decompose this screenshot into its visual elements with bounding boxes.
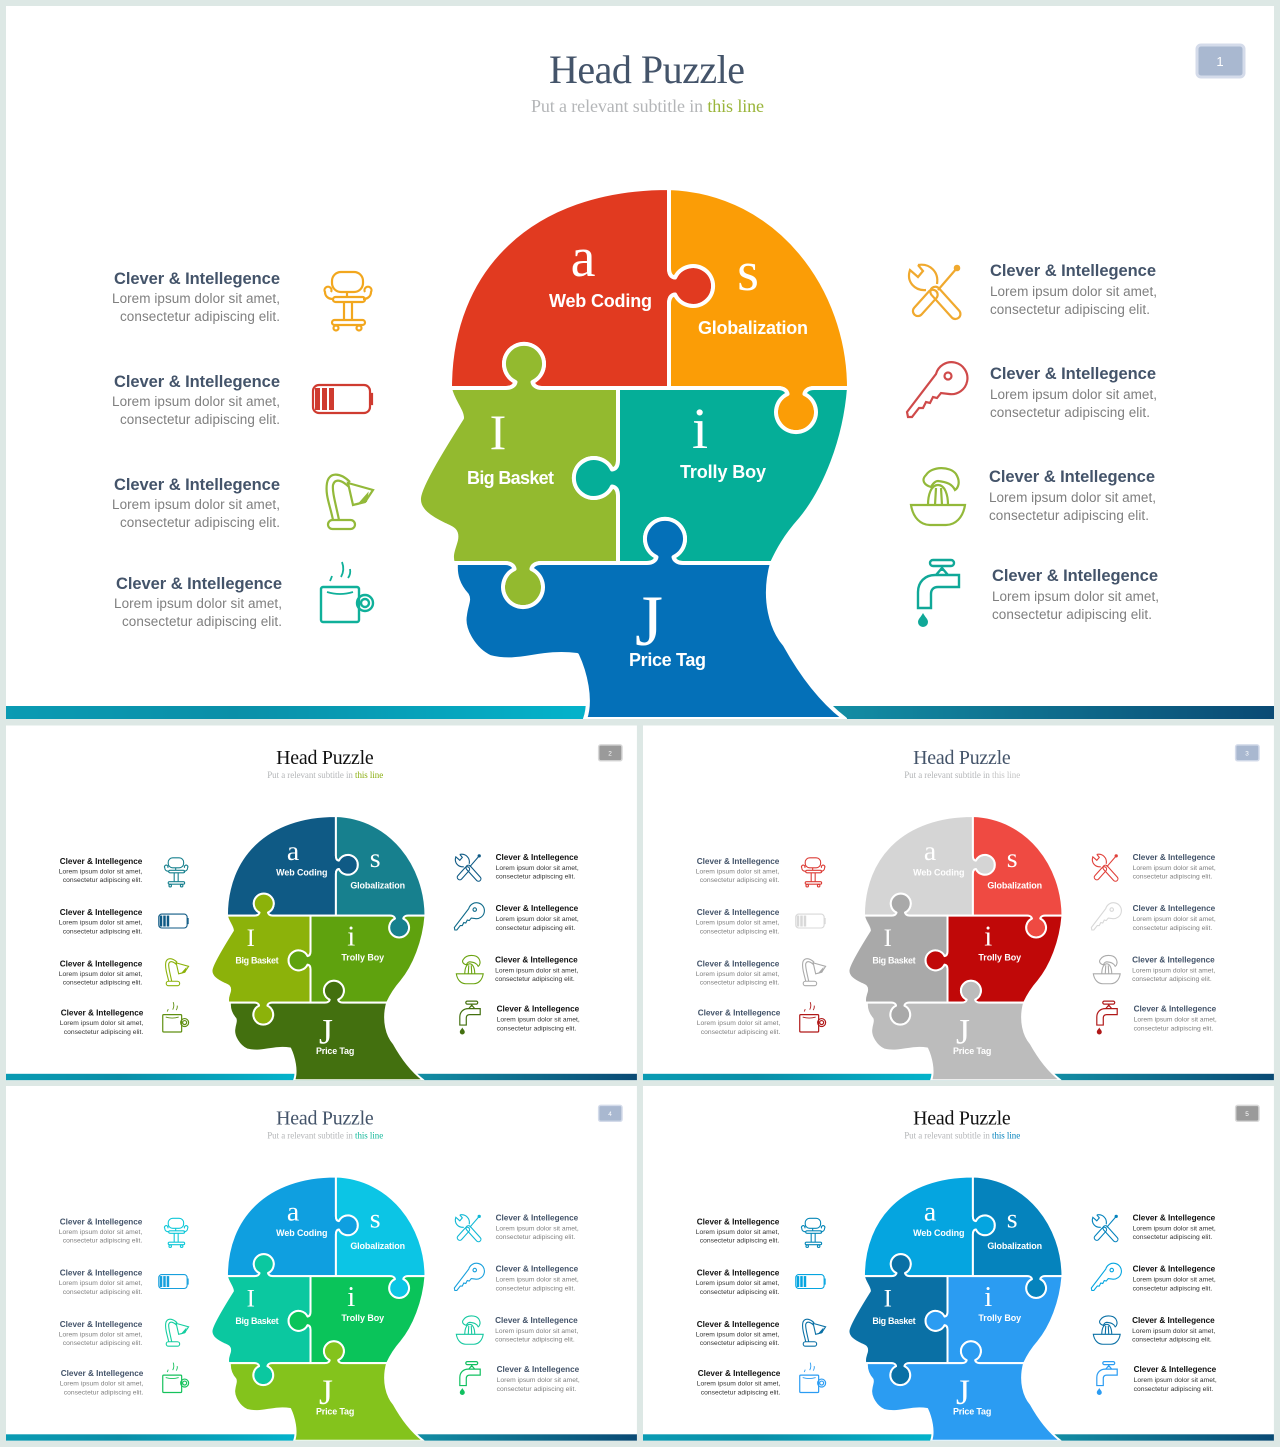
callout: faucet: Clever & Intellegence [992,567,1158,585]
callout: lamp [59,1319,189,1347]
callout: faucet [1097,1001,1217,1034]
callout: faucet: Clever & Intellegence [1134,1365,1217,1374]
callout: key: consectetur adipiscing elit. [990,405,1150,420]
callout: battery: consectetur adipiscing elit. [120,412,280,427]
callout: lamp: Lorem ipsum dolor sit amet, [696,971,779,978]
subtitle: Put a relevant subtitle in this line [267,770,383,780]
subtitle: Put a relevant subtitle in this line [904,770,1020,780]
callout: chair: consectetur adipiscing elit. [120,309,280,324]
puzzle head: s [370,1203,381,1234]
callout: lamp: consectetur adipiscing elit. [700,980,779,987]
callout: battery: Lorem ipsum dolor sit amet, [112,394,280,409]
callout: cup: Lorem ipsum dolor sit amet, [60,1381,143,1388]
callout: key: Clever & Intellegence [496,904,579,913]
callout: faucet [460,1362,580,1395]
puzzle head: a [287,836,299,867]
puzzle head: Globalization [987,1241,1042,1251]
callout: lamp: consectetur adipiscing elit. [63,1340,142,1347]
callout: chair: Clever & Intellegence [697,1217,780,1226]
callout: key [1091,1263,1216,1292]
callout: faucet [460,1001,580,1034]
puzzle head: Price Tag [316,1046,354,1056]
callout: tools: Clever & Intellegence [496,1213,579,1222]
callout: battery: consectetur adipiscing elit. [700,928,779,935]
callout: chair: Lorem ipsum dolor sit amet, [696,868,779,875]
puzzle head: Big Basket [235,955,279,965]
callout: faucet: consectetur adipiscing elit. [1134,1026,1213,1033]
puzzle head: I [247,1285,255,1312]
callout: juicer: Clever & Intellegence [989,468,1155,486]
puzzle head: Web Coding [913,867,964,877]
puzzle head: Trolly Boy [978,1313,1021,1323]
callout: tools [455,1213,579,1243]
puzzle head: Big Basket [872,1316,916,1326]
puzzle head: s [1007,1203,1018,1234]
puzzle head: J [635,581,663,661]
panel: main slide 1 [6,6,1274,719]
callout: cup [697,1002,826,1036]
puzzle head: i [347,920,355,952]
callout: juicer: consectetur adipiscing elit. [495,976,575,983]
panel: slide 5 blue [643,1086,1274,1441]
callout: faucet: Lorem ipsum dolor sit amet, [497,1377,580,1384]
callout: cup: Clever & Intellegence [61,1369,144,1378]
callout: chair: Lorem ipsum dolor sit amet, [59,1229,142,1236]
callout: tools: consectetur adipiscing elit. [990,302,1150,317]
puzzle head: Web Coding [276,1228,327,1238]
title: Head Puzzle [276,1107,374,1129]
callout: battery [59,908,188,935]
callout: faucet: consectetur adipiscing elit. [1134,1386,1213,1393]
callout: lamp: Clever & Intellegence [60,959,143,968]
puzzle head: J [319,1372,333,1412]
callout: juicer: consectetur adipiscing elit. [1132,1337,1212,1344]
page badge [599,1105,622,1121]
callout: cup: Clever & Intellegence [698,1009,781,1018]
callout: cup: Lorem ipsum dolor sit amet, [60,1020,143,1027]
callout: juicer: Lorem ipsum dolor sit amet, [989,490,1156,505]
callout: cup: Clever & Intellegence [116,575,282,593]
callout: lamp: Lorem ipsum dolor sit amet, [112,497,280,512]
puzzle head: Web Coding [913,1228,964,1238]
title: Head Puzzle [913,747,1011,769]
callout: tools: consectetur adipiscing elit. [496,874,575,881]
puzzle head: s [1007,843,1018,874]
callout: chair [112,270,372,330]
subtitle: Put a relevant subtitle in this line [531,96,764,116]
callout: battery: consectetur adipiscing elit. [63,1289,142,1296]
callout: lamp [696,1319,826,1347]
puzzle head: Trolly Boy [341,1313,384,1323]
callout: lamp: Clever & Intellegence [114,476,280,494]
page badge [1236,1105,1259,1121]
puzzle head: Web Coding [276,867,327,877]
callout: tools: Lorem ipsum dolor sit amet, [496,865,579,872]
callout: lamp [112,475,373,530]
callout: lamp: Clever & Intellegence [60,1320,143,1329]
callout: juicer: Lorem ipsum dolor sit amet, [1132,967,1215,974]
callout: lamp: Clever & Intellegence [697,1320,780,1329]
callout: juicer: Clever & Intellegence [495,955,578,964]
callout: lamp: consectetur adipiscing elit. [63,980,142,987]
panel: slide 4 aqua and green [6,1086,637,1441]
callout: chair [696,1217,825,1247]
callout: battery: Lorem ipsum dolor sit amet, [59,1280,142,1287]
callout: juicer: consectetur adipiscing elit. [1132,976,1212,983]
callout: juicer [1093,955,1215,984]
callout: chair: Lorem ipsum dolor sit amet, [696,1229,779,1236]
callout: cup: consectetur adipiscing elit. [701,1389,780,1396]
callout: cup: Clever & Intellegence [698,1369,781,1378]
puzzle head: s [370,843,381,874]
callout: chair [59,857,188,887]
callout: chair: consectetur adipiscing elit. [63,877,142,884]
callout: battery [696,1269,825,1296]
callout: faucet: Lorem ipsum dolor sit amet, [497,1017,580,1024]
puzzle head: Price Tag [629,650,706,670]
callout: chair: consectetur adipiscing elit. [63,1238,142,1245]
puzzle head: Big Basket [872,955,916,965]
title: Head Puzzle [549,47,745,92]
puzzle head: I [247,925,255,952]
page badge: 3 [1245,750,1249,757]
page badge: 1 [1216,54,1224,69]
callout: tools: Lorem ipsum dolor sit amet, [496,1225,579,1232]
title: Head Puzzle [276,747,374,769]
callout: tools: Lorem ipsum dolor sit amet, [1133,1225,1216,1232]
callout: key [454,1263,579,1292]
callout: battery: Clever & Intellegence [697,1269,780,1278]
callout: key: Clever & Intellegence [990,365,1156,383]
callout: cup: Lorem ipsum dolor sit amet, [114,596,282,611]
callout: juicer: Lorem ipsum dolor sit amet, [495,1328,578,1335]
puzzle head: a [924,1196,936,1227]
callout: key: Lorem ipsum dolor sit amet, [1133,916,1216,923]
callout: tools: Clever & Intellegence [990,262,1156,280]
callout: lamp: Lorem ipsum dolor sit amet, [59,971,142,978]
callout: cup [114,562,373,629]
callout: battery: Clever & Intellegence [114,373,280,391]
callout: lamp [696,959,826,987]
callout: faucet: Clever & Intellegence [1134,1005,1217,1014]
callout: key: consectetur adipiscing elit. [1133,925,1212,932]
puzzle head: Globalization [350,1241,405,1251]
callout: cup: consectetur adipiscing elit. [122,614,282,629]
callout: cup: consectetur adipiscing elit. [64,1029,143,1036]
callout: tools [909,262,1157,321]
puzzle head [848,1177,1062,1441]
callout: cup: Lorem ipsum dolor sit amet, [697,1381,780,1388]
callout: chair: consectetur adipiscing elit. [700,877,779,884]
callout: lamp: consectetur adipiscing elit. [700,1340,779,1347]
callout: key: Lorem ipsum dolor sit amet, [1133,1277,1216,1284]
callout: lamp: consectetur adipiscing elit. [120,515,280,530]
callout: lamp: Lorem ipsum dolor sit amet, [696,1331,779,1338]
callout: juicer: Lorem ipsum dolor sit amet, [495,967,578,974]
callout: tools [1092,853,1216,882]
callout: tools [1092,1213,1216,1243]
callout: key: consectetur adipiscing elit. [496,925,575,932]
callout: cup: consectetur adipiscing elit. [64,1389,143,1396]
puzzle head: a [571,227,596,289]
callout: lamp: Lorem ipsum dolor sit amet, [59,1331,142,1338]
callout: key: Lorem ipsum dolor sit amet, [496,916,579,923]
callout: key: consectetur adipiscing elit. [1133,1285,1212,1292]
subtitle: Put a relevant subtitle in this line [267,1131,383,1141]
puzzle head: Globalization [698,318,808,338]
callout: juicer: Lorem ipsum dolor sit amet, [1132,1328,1215,1335]
callout: tools: Lorem ipsum dolor sit amet, [990,284,1157,299]
callout: chair: Lorem ipsum dolor sit amet, [112,291,280,306]
callout: battery [696,908,825,935]
callout: faucet: Lorem ipsum dolor sit amet, [1134,1377,1217,1384]
callout: cup [60,1002,189,1036]
puzzle head: i [984,1281,992,1313]
callout: tools: consectetur adipiscing elit. [1133,874,1212,881]
callout: key: Clever & Intellegence [1133,1265,1216,1274]
callout: tools [455,853,579,882]
callout: battery [112,373,372,427]
callout: faucet: consectetur adipiscing elit. [497,1026,576,1033]
callout: battery: consectetur adipiscing elit. [63,928,142,935]
callout: faucet: Lorem ipsum dolor sit amet, [992,589,1159,604]
callout: tools: Clever & Intellegence [1133,1213,1216,1222]
callout: cup: Lorem ipsum dolor sit amet, [697,1020,780,1027]
puzzle head: i [984,920,992,952]
puzzle head: Trolly Boy [341,952,384,962]
callout: tools: consectetur adipiscing elit. [1133,1234,1212,1241]
callout: lamp: Clever & Intellegence [697,959,780,968]
page badge [1236,745,1259,761]
puzzle head: Trolly Boy [978,952,1021,962]
callout: cup: consectetur adipiscing elit. [701,1029,780,1036]
callout: battery: Lorem ipsum dolor sit amet, [59,920,142,927]
callout: cup [697,1363,826,1396]
callout: key: Lorem ipsum dolor sit amet, [496,1277,579,1284]
callout: chair: consectetur adipiscing elit. [700,1238,779,1245]
puzzle head: J [956,1372,970,1412]
callout: faucet [918,560,1159,627]
puzzle head: s [737,241,759,303]
callout: lamp [59,959,189,987]
callout: key: consectetur adipiscing elit. [496,1285,575,1292]
callout: juicer [456,1316,578,1344]
callout: juicer [1093,1316,1215,1344]
callout: battery: Clever & Intellegence [60,908,143,917]
callout: chair: Clever & Intellegence [60,1217,143,1226]
callout: faucet [1097,1362,1217,1395]
page badge: 4 [608,1111,612,1118]
callout: battery: Clever & Intellegence [60,1269,143,1278]
callout: juicer [911,468,1156,525]
callout: juicer: Clever & Intellegence [1132,1316,1215,1325]
callout: key [1091,903,1216,932]
callout: chair [59,1217,188,1247]
callout: battery [59,1269,188,1296]
callout: faucet: Lorem ipsum dolor sit amet, [1134,1017,1217,1024]
callout: cup [60,1363,189,1396]
puzzle head: J [319,1011,333,1051]
puzzle head [211,1177,425,1441]
puzzle head: Web Coding [549,291,652,311]
puzzle head: Globalization [987,881,1042,891]
callout: faucet: Clever & Intellegence [497,1365,580,1374]
callout: juicer: consectetur adipiscing elit. [495,1337,575,1344]
puzzle head: Price Tag [953,1406,991,1416]
callout: tools: consectetur adipiscing elit. [496,1234,575,1241]
callout: juicer [456,955,578,984]
page badge: 2 [608,750,612,757]
callout: battery: Lorem ipsum dolor sit amet, [696,1280,779,1287]
puzzle head: Big Basket [467,468,554,488]
puzzle head: J [956,1011,970,1051]
puzzle head: I [490,404,506,460]
subtitle: Put a relevant subtitle in this line [904,1131,1020,1141]
callout: key: Clever & Intellegence [1133,904,1216,913]
callout: chair: Lorem ipsum dolor sit amet, [59,868,142,875]
callout: faucet: consectetur adipiscing elit. [497,1386,576,1393]
callout: battery: Clever & Intellegence [697,908,780,917]
page badge: 5 [1245,1111,1249,1118]
callout: faucet: consectetur adipiscing elit. [992,607,1152,622]
callout: chair: Clever & Intellegence [60,857,143,866]
puzzle head: a [287,1196,299,1227]
panel: slide 3 red and gray [643,725,1274,1080]
callout: faucet: Clever & Intellegence [497,1005,580,1014]
callout: tools: Lorem ipsum dolor sit amet, [1133,865,1216,872]
puzzle head [848,816,1062,1080]
panel: slide 2 green and navy [6,725,637,1080]
callout: chair: Clever & Intellegence [697,857,780,866]
page badge [1197,45,1244,77]
puzzle head [419,188,849,719]
callout: key [454,903,579,932]
callout: tools: Clever & Intellegence [496,853,579,862]
page badge [599,745,622,761]
puzzle head: a [924,836,936,867]
puzzle head: Globalization [350,881,405,891]
callout: juicer: consectetur adipiscing elit. [989,508,1149,523]
puzzle head: i [347,1281,355,1313]
puzzle head: Price Tag [953,1046,991,1056]
callout: tools: Clever & Intellegence [1133,853,1216,862]
puzzle head: Price Tag [316,1406,354,1416]
puzzle head: Big Basket [235,1316,279,1326]
puzzle head: I [884,925,892,952]
callout: juicer: Clever & Intellegence [495,1316,578,1325]
callout: key: Clever & Intellegence [496,1265,579,1274]
callout: key: Lorem ipsum dolor sit amet, [990,387,1157,402]
callout: chair: Clever & Intellegence [114,270,280,288]
puzzle head: Trolly Boy [680,462,766,482]
callout: key [907,362,1157,420]
puzzle head: i [692,396,708,461]
puzzle head: I [884,1285,892,1312]
callout: cup: Clever & Intellegence [61,1009,144,1018]
callout: juicer: Clever & Intellegence [1132,955,1215,964]
title: Head Puzzle [913,1107,1011,1129]
callout: battery: Lorem ipsum dolor sit amet, [696,920,779,927]
callout: battery: consectetur adipiscing elit. [700,1289,779,1296]
puzzle head [211,816,425,1080]
callout: chair [696,857,825,887]
